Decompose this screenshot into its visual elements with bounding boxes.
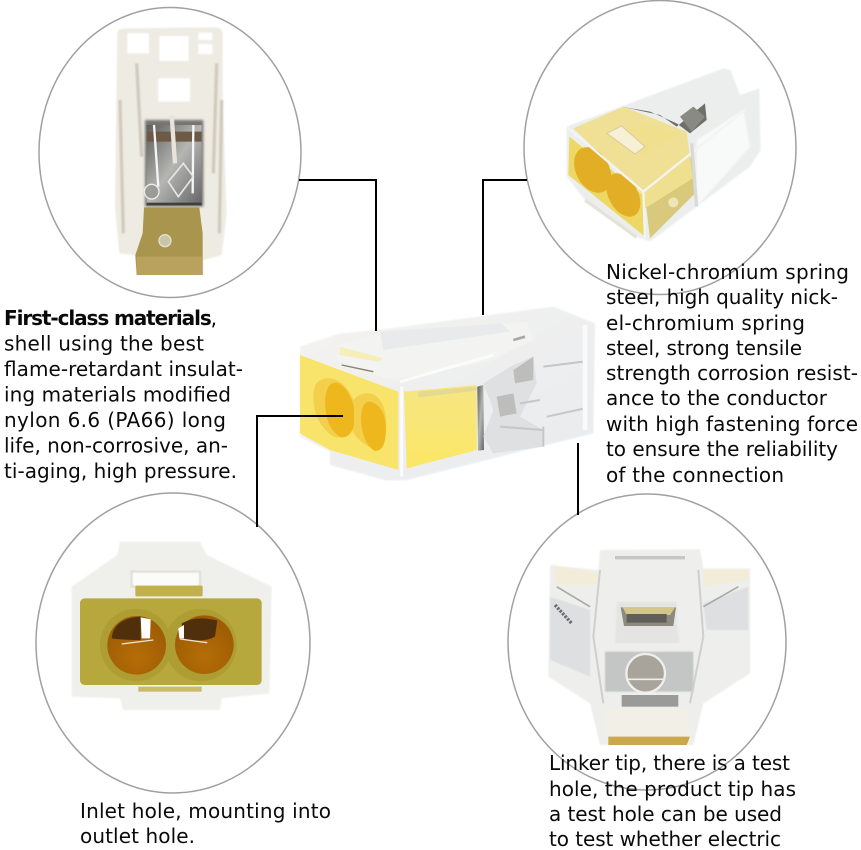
panel: top-left circle, side view of connector — [39, 8, 301, 298]
text block: inlet hole — [80, 799, 331, 848]
text block: linker tip test hole: Linker tip, there is a test — [549, 751, 790, 775]
panel: bottom-right circle, test hole view — [508, 494, 786, 790]
text block: first-class materials — [4, 306, 243, 483]
text block: nickel-chromium spring steel — [606, 260, 858, 487]
text block: first-class materials: flame-retardant insulat- — [4, 357, 243, 381]
text block: linker tip test hole — [549, 751, 796, 850]
text block: nickel-chromium spring steel: ance to the conductor — [606, 386, 828, 410]
text block: first-class materials: nylon 6.6 (PA66) long — [4, 408, 226, 432]
text block: nickel-chromium spring steel: el-chromium spring — [606, 311, 805, 335]
text block: first-class materials: ti-aging, high pressure. — [4, 459, 237, 483]
text block: linker tip test hole: a test hole can be used — [549, 802, 782, 826]
text block: nickel-chromium spring steel: steel, high quality nick- — [606, 285, 838, 309]
connector line: top-left circle to body — [299, 180, 376, 331]
connector line: top-right circle to body — [483, 180, 527, 315]
connector line: body to bottom-right circle — [577, 443, 579, 515]
text block: nickel-chromium spring steel: Nickel-chromium spring — [606, 260, 849, 284]
text block: first-class materials: ing materials modified — [4, 382, 231, 406]
text block: linker tip test hole: hole, the product tip has — [549, 777, 796, 801]
panel: central connector main product image — [300, 307, 595, 481]
text block: nickel-chromium spring steel: steel, strong tensile — [606, 336, 802, 360]
text block: inlet hole: outlet hole. — [80, 824, 195, 848]
text block: nickel-chromium spring steel: strength corrosion resist- — [606, 361, 858, 385]
text block: nickel-chromium spring steel: to ensure the reliability — [606, 437, 838, 461]
text block: nickel-chromium spring steel: with high fastening force — [606, 412, 858, 436]
panel: top-right circle, angled view of connector — [524, 0, 796, 294]
text block: first-class materials: shell using the best — [4, 332, 204, 356]
panel: bottom-left circle, inlet hole view — [36, 493, 310, 793]
text block: first-class materials: First-class materials, — [4, 306, 217, 330]
text block: inlet hole: Inlet hole, mounting into — [80, 799, 331, 823]
text block: first-class materials: life, non-corrosive, an- — [4, 434, 228, 458]
text block: nickel-chromium spring steel: of the connection — [606, 463, 784, 487]
connector line: inlet hole to bottom-left circle — [257, 416, 343, 527]
